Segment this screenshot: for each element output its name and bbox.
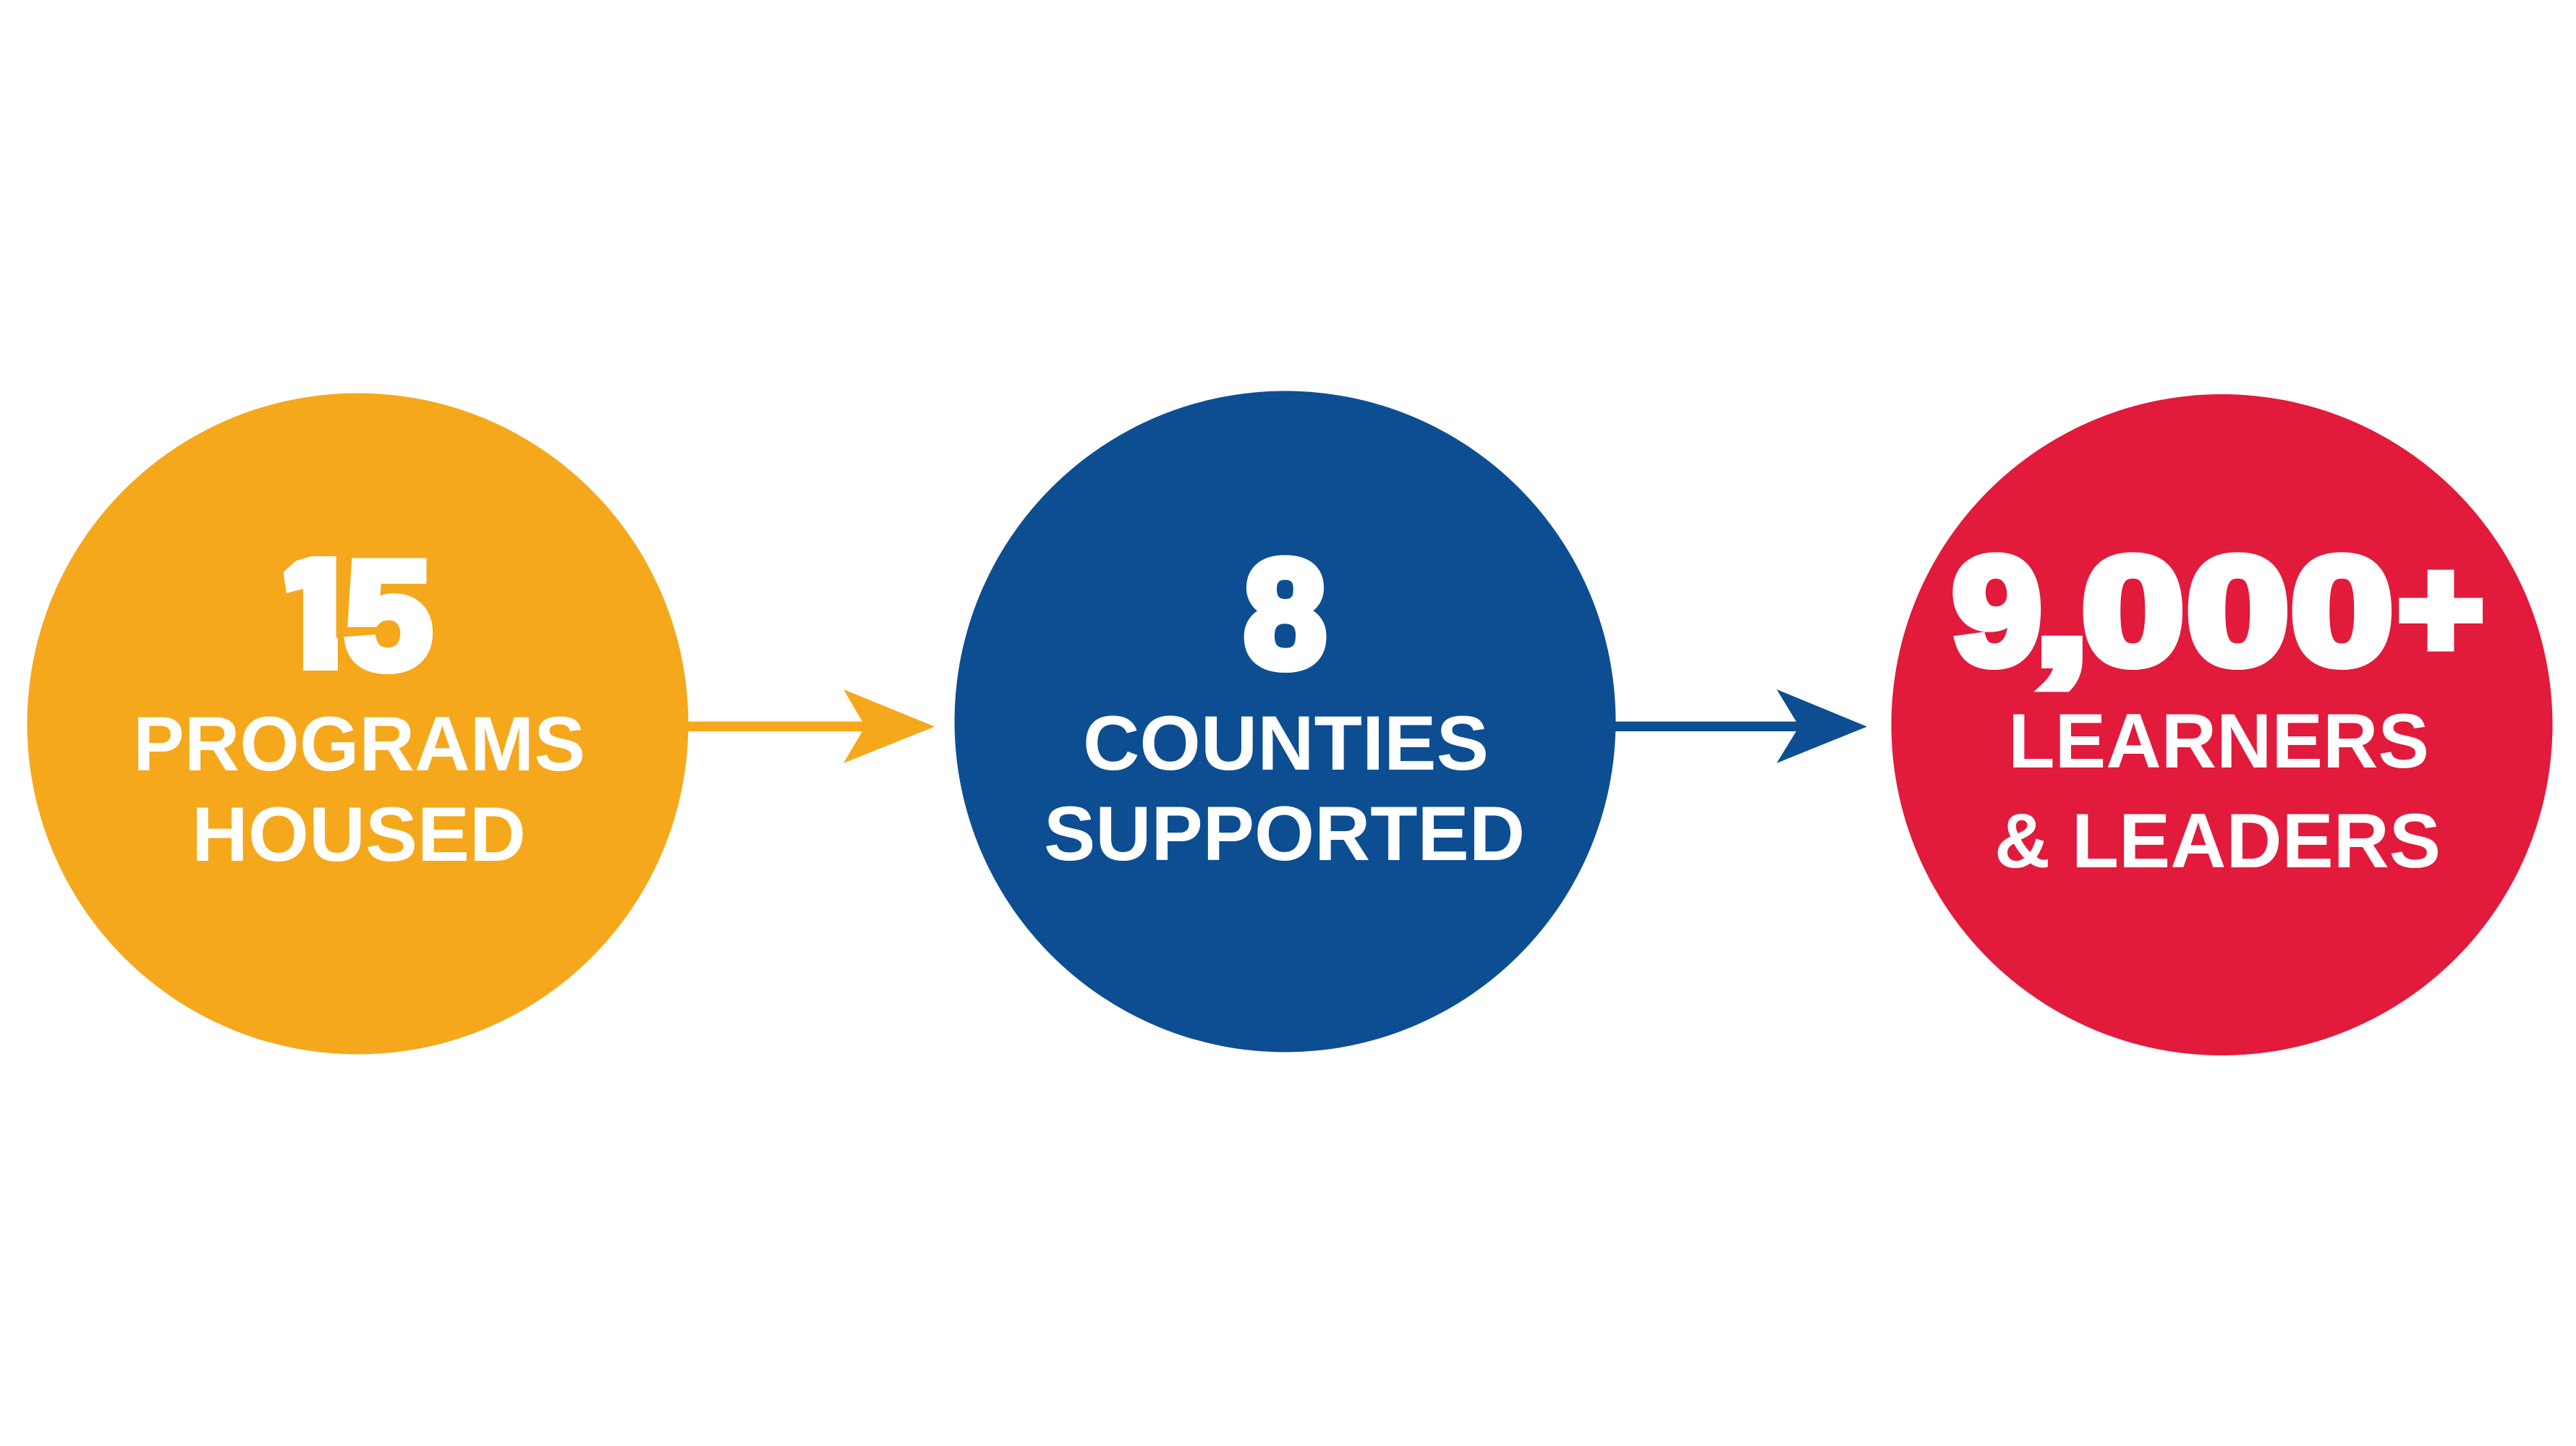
arrow: blue [1615, 689, 1867, 763]
number: 9,000+: 0 [2187, 526, 2289, 696]
number: 15: 5 [345, 530, 432, 700]
number: 15: 1 [286, 529, 347, 699]
label: counties: COUNTIES [1083, 699, 1489, 786]
number: 9,000+ [1952, 526, 2483, 696]
label: and leaders: & LEADERS [1994, 797, 2441, 884]
panel: counties supported [955, 391, 1616, 1052]
circle: orange [27, 394, 689, 1055]
label: programs: PROGRAMS [133, 700, 585, 787]
label: learners: LEARNERS [2008, 697, 2429, 784]
panel: programs housed [27, 394, 689, 1055]
number: 9,000+: , [2034, 526, 2089, 696]
label: supported: SUPPORTED [1044, 790, 1525, 877]
circle: blue [955, 391, 1616, 1052]
number: 15 [284, 556, 433, 674]
number: 9,000+: + [2398, 530, 2483, 688]
number: 9,000+: 0 [2291, 526, 2393, 696]
panel: learners and leaders [1891, 394, 2552, 1055]
label: housed: HOUSED [192, 791, 526, 877]
arrow: orange [688, 689, 935, 763]
number: 8: 8 [1244, 529, 1326, 699]
number: 9,000+: 9 [1952, 526, 2041, 696]
number: 9,000+: 0 [2082, 526, 2184, 696]
circle: red [1891, 394, 2552, 1055]
